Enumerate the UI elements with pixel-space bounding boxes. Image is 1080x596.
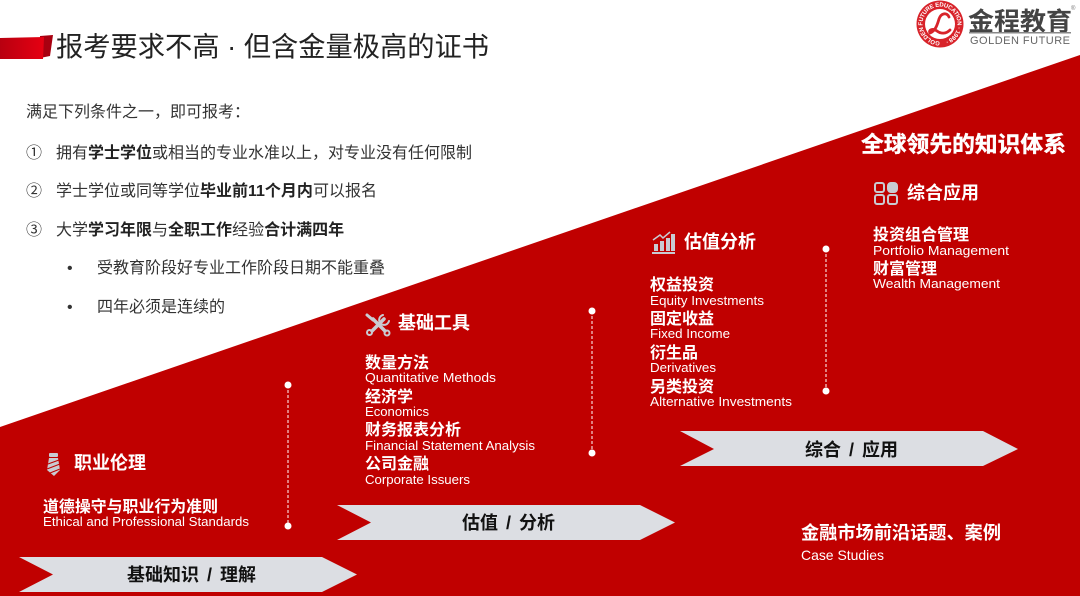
course: portfolio: 投资组合管理 [873,225,969,244]
panel: ethics [43,452,249,529]
title ribbon [0,35,53,59]
course: alternatives: 另类投资 [650,377,714,396]
requirements text block: 拥有学士学位或相当的专业水准以上，对专业没有任何限制 [56,143,472,162]
course: fixed income: 固定收益 [650,309,714,328]
course: economics: 经济学 [365,387,413,406]
condition 2: ② [26,182,42,200]
dotted connector 3 [822,246,830,394]
panel: tools [365,313,536,487]
dotted connector 1 [284,382,292,530]
panel: ethics: Ethical and Professional Standards [43,514,249,529]
heading: application: 综合应用 [907,182,979,203]
arrow: application [680,431,1018,466]
panel: valuation: Derivatives [650,360,717,375]
panel: integrated application: Wealth Management [873,276,1000,291]
condition 3: ③ [26,221,42,239]
requirements text block: 大学学习年限与全职工作经验合计满四年 [56,220,344,239]
case studies block: Case Studies [801,547,884,563]
course: quantitative: 数量方法 [365,353,429,372]
dotted connector 2 [588,308,596,456]
condition 1: ① [26,144,42,162]
arrow: valuation [337,505,675,540]
course: derivatives: 衍生品 [650,344,698,362]
intro line: 满足下列条件之一，即可报考： [26,103,250,121]
course: corporate issuers: 公司金融 [365,454,429,473]
heading: tools: 基础工具 [398,313,470,333]
arrow: foundation: 基础知识 / 理解 [127,565,256,585]
icon: bar chart [652,232,675,254]
requirements text block [26,103,472,316]
panel: valuation: Alternative Investments [650,394,793,409]
logo: Golden Future: GOLDEN FUTURE EDUCATION · 1998 · [918,2,962,46]
panel: valuation [650,232,793,409]
icon: tie [47,453,60,476]
logo: Golden Future: ® [1071,5,1076,12]
arrow: application: 综合 / 应用 [805,439,898,460]
requirements text block: 学士学位或同等学位毕业前11个月内可以报名 [56,181,377,200]
arrow: foundation [19,557,357,592]
course: wealth: 财富管理 [873,259,937,278]
requirements text block: 四年必须是连续的 [97,298,225,316]
panel: valuation: Equity Investments [650,293,765,308]
case studies block: 金融市场前沿话题、案例 [801,522,1001,543]
panel: tools: Corporate Issuers [365,472,471,487]
panel: tools: Financial Statement Analysis [365,438,536,453]
course: equity: 权益投资 [650,275,714,294]
panel: valuation: Fixed Income [650,326,730,341]
icon: four squares [875,183,897,204]
logo: Golden Future: 金程教育 [968,7,1072,36]
case studies block [801,522,1001,563]
panel: integrated application [873,182,1009,291]
panel: integrated application: Portfolio Management [873,243,1009,258]
sub-point 1: • [67,260,73,277]
arrow: valuation: 估值 / 分析 [462,513,555,533]
heading: valuation: 估值分析 [684,232,756,252]
ethics course: 道德操守与职业行为准则 [43,497,218,516]
icon: crossed tools [367,315,390,336]
heading: ethics: 职业伦理 [74,452,146,473]
panel: tools: Quantitative Methods [365,370,497,385]
logo: Golden Future [916,0,1076,48]
course: financial statements: 财务报表分析 [365,420,461,439]
requirements text block: 受教育阶段好专业工作阶段日期不能重叠 [97,259,385,277]
sub-point 2: • [67,299,73,316]
heading: knowledge system: 全球领先的知识体系 [861,132,1066,157]
title: 报考要求不高 · 但含金量极高的证书 [56,31,489,62]
panel: tools: Economics [365,404,430,419]
logo: Golden Future: GOLDEN FUTURE [970,35,1070,47]
